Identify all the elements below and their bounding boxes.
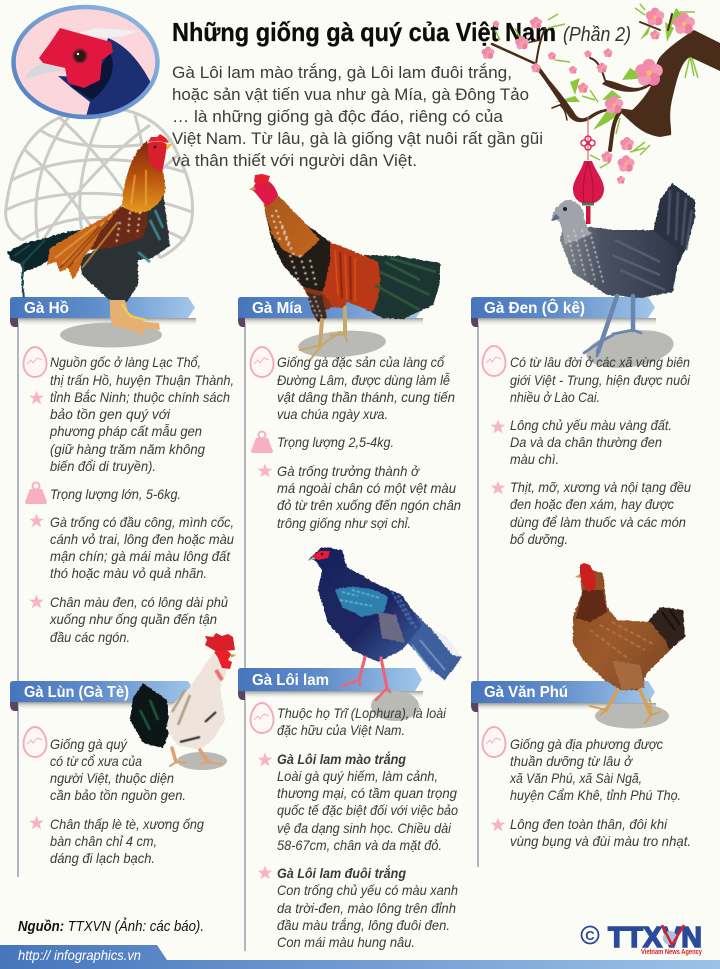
panel text: Gà Lôi lam: thương mại, có tầm quan trọng bbox=[277, 785, 457, 801]
panel text: Gà Văn Phú: thuần dưỡng từ lâu ở bbox=[510, 753, 633, 769]
panel text: Gà Hồ: Gà trống có đầu công, mình cốc, bbox=[50, 514, 234, 530]
panel text: Gà Lùn: bàn chân chỉ 4 cm, bbox=[50, 833, 157, 849]
panel text: Gà Đen: đen hoặc đen xám, hay được bbox=[510, 496, 674, 512]
panel text: Gà Hồ bbox=[49, 354, 234, 645]
footer bar: http:// infographics.vn bbox=[18, 947, 141, 963]
banner: Gà Văn Phú bbox=[471, 681, 656, 712]
intro text: và thân thiết với người dân Việt. bbox=[172, 151, 417, 170]
banner: Gà Hồ bbox=[10, 297, 196, 327]
banner: Gà Lùn: Gà Lùn (Gà Tè) bbox=[24, 684, 129, 701]
intro text: … là những giống gà độc đáo, riêng có của bbox=[172, 107, 504, 126]
panel text: Gà Văn Phú: Giống gà địa phương được bbox=[510, 736, 663, 752]
panel text: Gà Hồ: Chân màu đen, có lông dài phủ bbox=[50, 594, 228, 610]
panel icons: Gà Mía bbox=[250, 347, 274, 477]
panel text: Gà Hồ: Trọng lượng lớn, 5-6kg. bbox=[50, 486, 181, 502]
panel text: Gà Hồ: xuống như ống quần đến tận bbox=[49, 611, 217, 627]
panel text: Gà Văn Phú: Lông đen toàn thân, đôi khi bbox=[510, 816, 668, 832]
intro text: hoặc sản vật tiến vua như gà Mía, gà Đông Tảo bbox=[172, 85, 529, 104]
panel text: Gà Hồ: mận chín; gà mái màu lông đất bbox=[50, 548, 231, 564]
panel text: Gà Mía: Trọng lượng 2,5-4kg. bbox=[277, 434, 394, 450]
panel text: Gà Hồ: phương pháp cất mẫu gen bbox=[49, 423, 202, 439]
ground shadows bbox=[60, 322, 676, 770]
panel text: Gà Đen: Có từ lâu đời ở các xã vùng biên bbox=[510, 354, 690, 370]
panel text: Gà Lôi lam: quốc tế đặc biệt đối với việc bảo bbox=[277, 802, 458, 818]
leaves bbox=[555, 8, 682, 130]
panel text: Gà Đen: giới Việt - Trung, hiện được nuôi bbox=[510, 372, 691, 388]
portrait: Lôi lam head bbox=[14, 7, 158, 124]
vertical rules bbox=[18, 322, 478, 951]
banner: Gà Văn Phú: Gà Văn Phú bbox=[484, 684, 568, 701]
panel text: Gà Đen: màu chì. bbox=[510, 451, 559, 467]
panel text: Gà Đen: Thịt, mỡ, xương và nội tạng đều bbox=[510, 479, 691, 495]
trunk bbox=[536, 30, 720, 137]
panel text: Gà Lôi lam: đặc hữu của Việt Nam. bbox=[277, 722, 405, 738]
panel icons: Gà Lôi lam bbox=[250, 703, 274, 879]
panel text: Gà Lôi lam: vệ đa dạng sinh học. Chiều dài bbox=[277, 820, 452, 836]
chicken: Gà Lùn bbox=[130, 633, 236, 766]
chicken: Gà Mía bbox=[249, 174, 440, 360]
panel text: Gà Lôi lam: da trời-đen, mào lông trên đỉnh bbox=[277, 900, 456, 916]
intro text: Việt Nam. Từ lâu, gà là giống vật nuôi rất gần gũi bbox=[172, 129, 543, 148]
panel text: Gà Lùn: người Việt, thuộc diện bbox=[50, 770, 174, 786]
panel text: Gà Lôi lam: Con trống chủ yếu có màu xanh bbox=[277, 882, 458, 898]
panel text: Gà Hồ: đầu các ngón. bbox=[50, 629, 130, 645]
panel text: Gà Mía: Đường Lâm, được dùng làm lễ bbox=[277, 372, 450, 388]
panel text: Gà Mía: trông giống như sợi chỉ. bbox=[277, 515, 411, 531]
panel text: Gà Văn Phú bbox=[509, 736, 691, 849]
panel text: Gà Lôi lam: Gà Lôi lam mào trắng bbox=[277, 750, 406, 767]
intro text bbox=[172, 63, 543, 170]
panel text: Gà Mía: vật dâng thần thánh, cung tiến bbox=[277, 389, 455, 405]
panel text: Gà Văn Phú: xã Văn Phú, xã Sài Ngã, bbox=[509, 770, 642, 786]
banner: Gà Mía: Gà Mía bbox=[252, 300, 302, 317]
banner: Gà Đen bbox=[471, 297, 656, 327]
panel text: Gà Mía: đỏ từ trên xuống đến ngón chân bbox=[277, 497, 461, 513]
chicken: Gà Hồ bbox=[7, 134, 173, 335]
panel text: Gà Hồ: cánh vỏ trai, lông đen hoặc màu bbox=[50, 531, 234, 547]
panel text: Gà Lôi lam: Loài gà quý hiếm, làm cảnh, bbox=[277, 768, 438, 784]
panel icons: Gà Văn Phú bbox=[482, 727, 506, 831]
chicken: Gà Đen bbox=[551, 183, 695, 356]
blossom branch with lantern bbox=[482, 4, 720, 224]
panel text: Gà Lôi lam: Gà Lôi lam đuôi trắng bbox=[277, 864, 406, 881]
panel text: Gà Lôi lam: Con mái màu hung nâu. bbox=[277, 934, 415, 950]
panel text: Gà Lùn: cần bảo tồn nguồn gen. bbox=[50, 787, 186, 803]
chicken: Gà Lôi lam bbox=[307, 547, 462, 700]
chicken: Gà Văn Phú bbox=[573, 563, 685, 723]
panel icons: Gà Lùn bbox=[24, 727, 46, 829]
logo: TTXVN: Vietnam News Agency bbox=[641, 949, 702, 956]
title: (Phần 2) bbox=[563, 24, 631, 46]
wire ball decoration bbox=[6, 108, 193, 258]
source line: Nguồn: TTXVN (Ảnh: các báo). bbox=[18, 917, 204, 935]
logo: TTXVN: TTXVN bbox=[608, 922, 702, 954]
panel text: Gà Văn Phú: huyện Cẩm Khê, tỉnh Phú Thọ. bbox=[510, 787, 681, 803]
panel icons: Gà Đen bbox=[482, 346, 506, 494]
panel text: Gà Lôi lam: đầu màu trắng, lông đuôi đen. bbox=[277, 917, 450, 933]
panel text: Gà Văn Phú: vùng bụng và đùi màu tro nhạt. bbox=[510, 833, 691, 849]
panel icons: Gà Hồ bbox=[24, 347, 47, 608]
panel text: Gà Đen: Da và da chân thường đen bbox=[510, 434, 662, 450]
panel text: Gà Đen: dùng để làm thuốc và các món bbox=[510, 514, 686, 530]
banner: Gà Đen: Gà Đen (Ô kê) bbox=[484, 298, 585, 317]
panel text: Gà Lùn: Chân thấp lè tè, xương ống bbox=[50, 816, 204, 832]
panel text: Gà Lôi lam: 58-67cm, chân và da mặt đỏ. bbox=[277, 837, 442, 853]
panel text: Gà Lôi lam bbox=[277, 705, 458, 950]
logo: TTXVN: C bbox=[585, 928, 595, 943]
panel text: Gà Lùn bbox=[50, 736, 204, 866]
banner: Gà Lôi lam bbox=[238, 668, 423, 700]
panel text: Gà Đen bbox=[510, 354, 691, 547]
panel text: Gà Đen: bổ dưỡng. bbox=[510, 531, 568, 547]
panel text: Gà Mía bbox=[277, 354, 461, 531]
blossoms bbox=[646, 7, 664, 26]
intro text: Gà Lôi lam mào trắng, gà Lôi lam đuôi trắng, bbox=[172, 63, 512, 82]
panel text: Gà Hồ: thị trấn Hồ, huyện Thuận Thành, bbox=[50, 372, 234, 388]
footer bar bbox=[0, 945, 720, 969]
panel text: Gà Hồ: bảo tồn gen quý với bbox=[50, 406, 171, 422]
panel text: Gà Đen: Lông chủ yếu màu vàng đất. bbox=[510, 417, 672, 433]
panel text: Gà Hồ: thó hoặc màu vỏ quả nhãn. bbox=[50, 565, 207, 581]
panel text: Gà Mía: Giống gà đặc sản của làng cổ bbox=[277, 354, 445, 370]
panel text: Gà Lùn: Giống gà quý bbox=[50, 736, 128, 752]
banner: Gà Hồ: Gà Hồ bbox=[24, 300, 69, 317]
lantern bbox=[587, 117, 589, 160]
title: Những giống gà quý của Việt Nam bbox=[172, 17, 556, 47]
banner: Gà Lôi lam: Gà Lôi lam bbox=[252, 672, 329, 689]
banner: Gà Lùn bbox=[10, 681, 196, 711]
panel text: Gà Lùn: có từ cổ xưa của bbox=[50, 753, 142, 769]
panel text: Gà Hồ: tỉnh Bắc Ninh; thuộc chính sách bbox=[50, 389, 230, 405]
panel text: Gà Mía: vua chúa ngày xưa. bbox=[277, 406, 388, 422]
banner: Gà Mía bbox=[238, 297, 423, 327]
panel text: Gà Đen: nhiều ở Lào Cai. bbox=[510, 389, 600, 405]
panel text: Gà Hồ: biến đổi di truyền). bbox=[50, 458, 156, 474]
panel text: Gà Mía: má ngoài chân có một vệt màu bbox=[277, 480, 456, 496]
panel text: Gà Lùn: dáng đi lạch bạch. bbox=[50, 850, 155, 866]
panel text: Gà Hồ: (giữ hàng trăm năm không bbox=[50, 441, 205, 457]
panel text: Gà Hồ: Nguồn gốc ở làng Lạc Thổ, bbox=[50, 354, 201, 370]
panel text: Gà Lôi lam: Thuộc họ Trĩ (Lophura), là loài bbox=[277, 705, 447, 721]
panel text: Gà Mía: Gà trống trưởng thành ở bbox=[277, 463, 420, 479]
